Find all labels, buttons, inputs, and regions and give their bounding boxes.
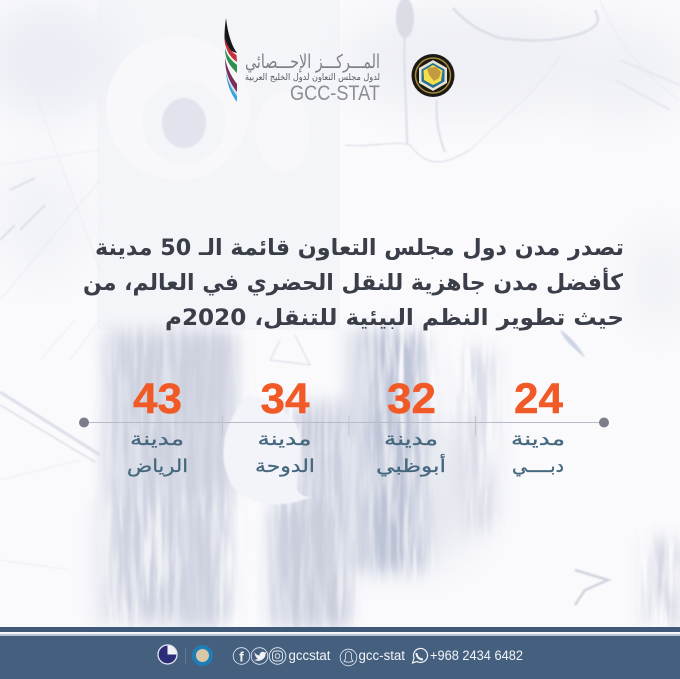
rank column: Doha: الدوحة: [255, 456, 315, 477]
icon: instagram: [269, 648, 286, 664]
rank column: Abu Dhabi: أبوظبي: [376, 454, 446, 477]
icon: GCC emblem: [412, 54, 454, 97]
rank column: Riyadh: [127, 375, 188, 477]
timeline axis: [79, 416, 609, 436]
headline line 2: كأفضل مدن جاهزية للنقل الحضري في العالم، من: [83, 267, 624, 296]
rank column: Doha: [255, 375, 315, 477]
headline line 1: تصدر مدن دول مجلس التعاون قائمة الـ 50 مدينة: [95, 235, 624, 261]
footer band: [0, 627, 680, 679]
rank column: Abu Dhabi: [376, 375, 446, 477]
logo Arabic subtitle: لدول مجلس التعاون لدول الخليج العربية: [245, 73, 380, 83]
handle: gccstat: gccstat: [288, 648, 331, 663]
headline: [83, 235, 624, 331]
icon: TUV badge: [192, 645, 213, 666]
label: Doha city: مدينة: [258, 429, 312, 450]
icon: twitter: [251, 648, 268, 664]
icon: facebook: [233, 648, 250, 664]
phone number: +968 2434 6482: [430, 648, 523, 663]
icon: whatsapp: [412, 648, 428, 663]
logo Arabic name: المـــركـــز الإحـــصائي: [245, 51, 380, 73]
label: Abu Dhabi city: مدينة: [384, 429, 438, 450]
label: Riyadh city: مدينة: [130, 429, 184, 450]
rank column: Riyadh: الرياض: [127, 456, 188, 477]
logo latin name: GCC-STAT: [290, 82, 380, 105]
icon: ribbon mark: [224, 18, 237, 102]
rank 34: 34: [260, 375, 310, 423]
rank column: Dubai: دبــــي: [512, 456, 564, 477]
headline line 3: حيث تطوير النظم البيئية للتنقل، 2020م: [165, 305, 624, 331]
rank 43: 43: [133, 375, 182, 423]
handle: gcc-stat: gcc-stat: [358, 648, 405, 663]
white brush mark behind Doha column: [223, 395, 311, 504]
map and sketch lines: [453, 8, 598, 40]
rank 24: 24: [514, 375, 563, 423]
ring motif top centre: [106, 36, 310, 180]
icon: facebook: f: [239, 648, 244, 664]
icon: certification badge: [158, 645, 177, 664]
label: Dubai city: مدينة: [511, 429, 565, 450]
icon: snapchat: [340, 649, 357, 666]
rank column: Dubai: [511, 375, 565, 477]
rank 32: 32: [387, 375, 436, 423]
logo: GCC-STAT statistical centre: [224, 18, 380, 105]
